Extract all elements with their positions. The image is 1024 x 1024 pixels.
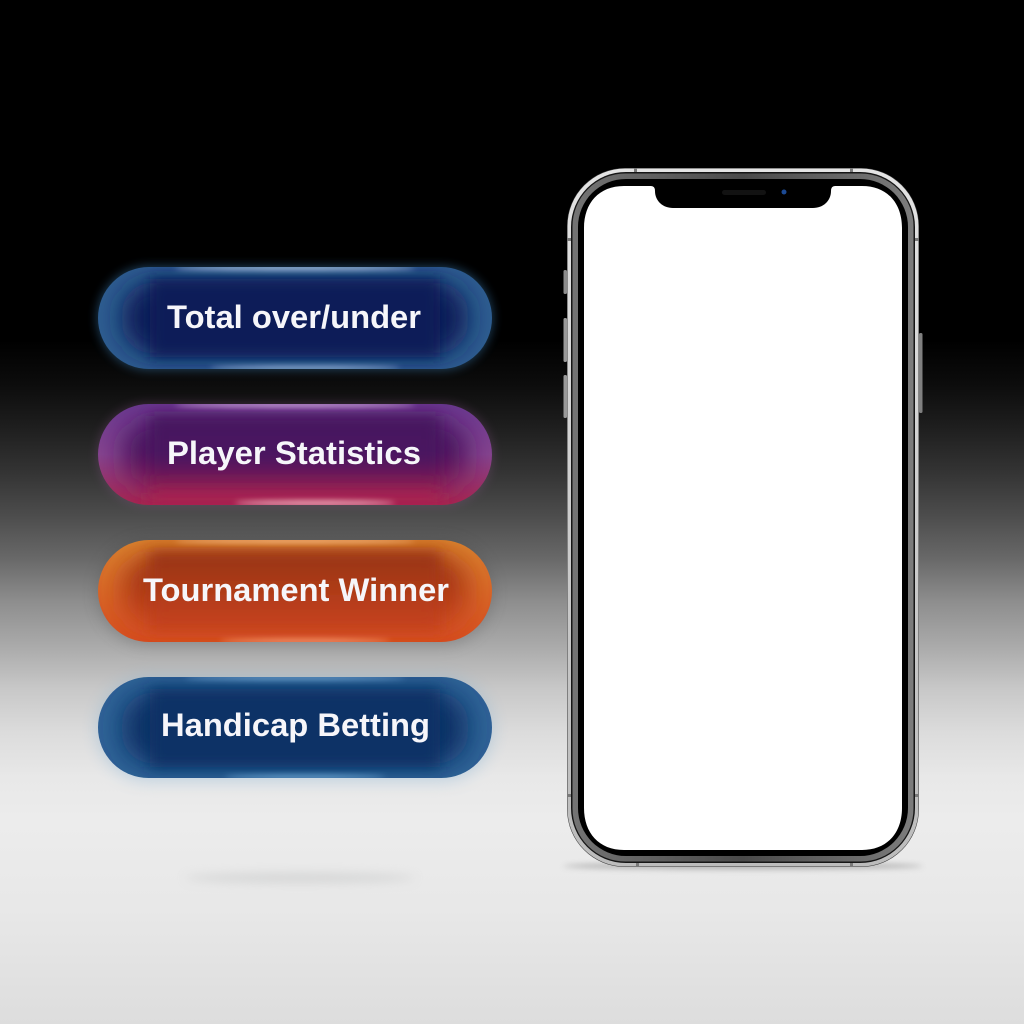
pill: Handicap Betting (97, 676, 493, 781)
front camera (782, 190, 786, 194)
speaker grille (722, 190, 766, 195)
phone mockup (564, 168, 922, 867)
icon: power button (919, 333, 922, 413)
antenna bands (567, 168, 919, 867)
phone shadow (563, 862, 923, 870)
label: Total over/under: Total over/under (167, 299, 421, 335)
pill: Tournament Winner (98, 538, 492, 645)
label: Tournament Winner: Tournament Winner (143, 572, 449, 608)
label: Player Statistics: Player Statistics (167, 435, 421, 471)
phone screen with notch (584, 186, 902, 850)
floor shadow under pills (185, 873, 415, 883)
icon: silent switch button (564, 270, 567, 294)
label: Handicap Betting: Handicap Betting (161, 707, 430, 743)
pill: Player Statistics (97, 402, 493, 506)
icon: volume up button (564, 318, 567, 362)
icon: volume down button (564, 375, 567, 418)
pill: Total over/under (97, 266, 493, 370)
phone frame (567, 168, 919, 867)
